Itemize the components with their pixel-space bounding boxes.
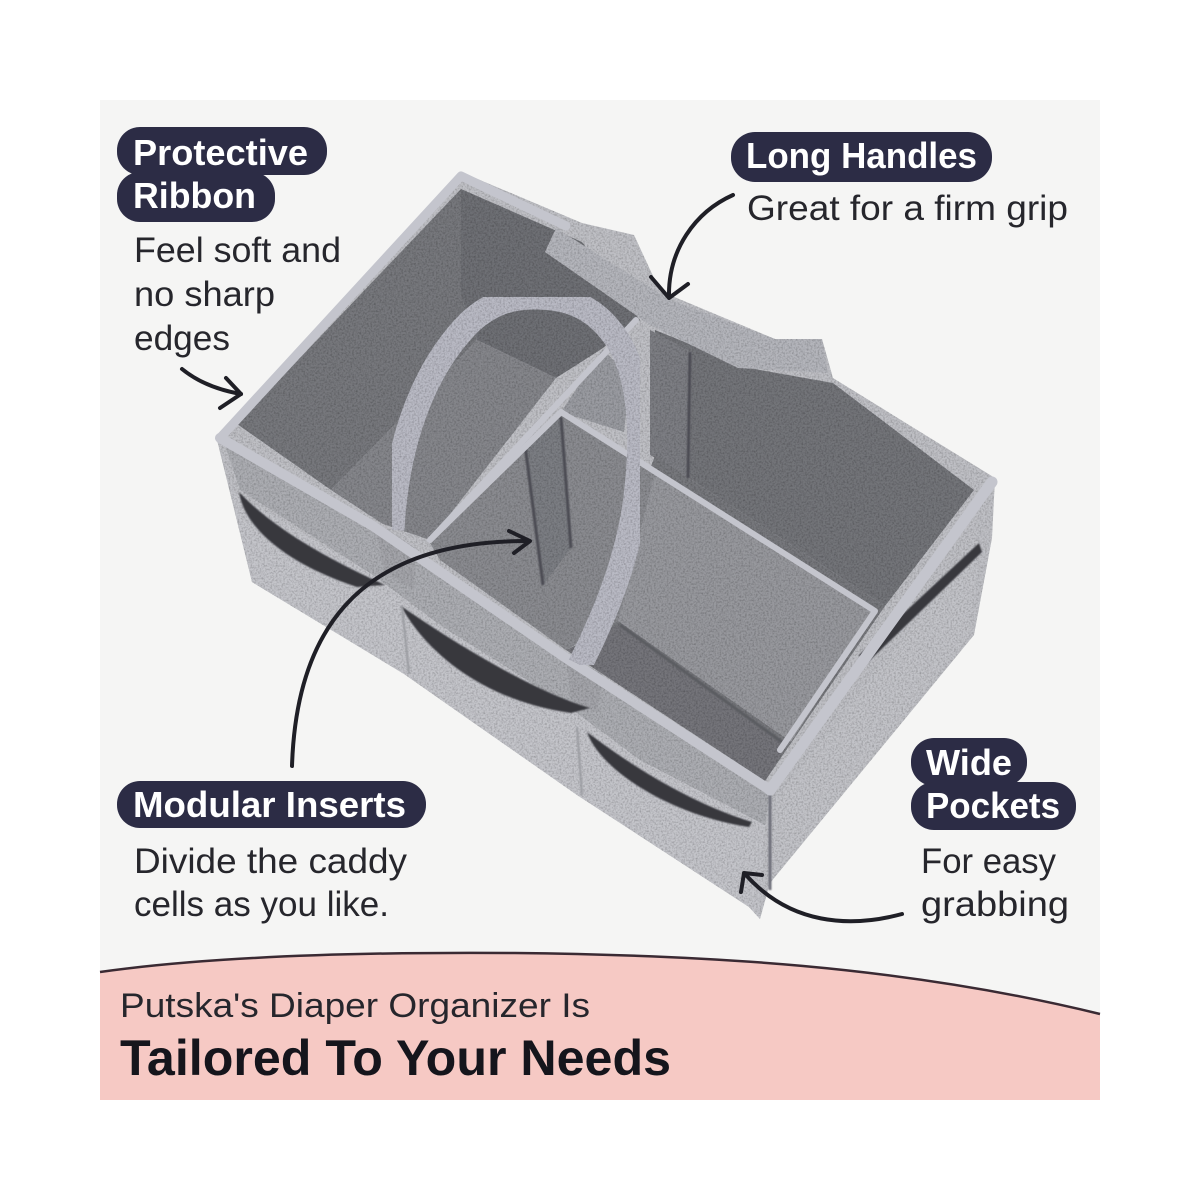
- banner subtitle: Putska's Diaper Organizer Is: [120, 987, 590, 1025]
- pill label: Long Handles: [746, 135, 977, 176]
- banner title: Tailored To Your Needs: [120, 1030, 671, 1086]
- right compartment back wall: [655, 330, 974, 606]
- bottom banner: [100, 953, 1100, 1100]
- right compartment floor: [582, 456, 885, 781]
- product: felt caddy organizer: [216, 172, 995, 919]
- pink curved band: [100, 953, 1100, 1100]
- arrow: to handle: [651, 195, 733, 298]
- left compartment floor: [331, 340, 556, 540]
- description text: For easy: [921, 842, 1056, 881]
- front pocket panel: [230, 490, 765, 919]
- background panel: [100, 100, 1100, 1100]
- insert compartment divider: [525, 417, 571, 585]
- description text: [921, 842, 1069, 924]
- left compartment back wall: [461, 189, 640, 378]
- callout: wide pockets: [911, 738, 1076, 924]
- left compartment left wall: [237, 189, 477, 490]
- pill label: Pockets: [926, 785, 1060, 826]
- front upper wall: [225, 445, 770, 825]
- arrow: to ribbon edge: [182, 369, 241, 408]
- handle base patches: [373, 520, 415, 590]
- callout: modular inserts: [117, 781, 426, 924]
- right compartment dividing strip: [650, 330, 692, 478]
- description text: grabbing: [921, 885, 1069, 924]
- description text: [134, 842, 408, 924]
- pill label: Protective: [133, 132, 308, 173]
- arrow: to pocket: [741, 873, 902, 921]
- modular insert long panel: [618, 470, 875, 742]
- callout: protective ribbon: [117, 127, 341, 358]
- pill label: Ribbon: [133, 175, 256, 216]
- callout: long handles: [731, 132, 1068, 228]
- right side panel: [770, 543, 980, 883]
- seams and strip lines: [402, 352, 786, 890]
- description text: no sharp: [134, 275, 275, 314]
- description text: edges: [134, 319, 230, 358]
- caddy outer body: [216, 172, 995, 919]
- pocket openings: [239, 492, 982, 827]
- insert compartment: [430, 412, 655, 650]
- back handle strap: [545, 228, 828, 373]
- pill label: [911, 738, 1076, 830]
- protective ribbon rim: [220, 176, 992, 790]
- pill label: Modular Inserts: [133, 784, 406, 825]
- description text: Divide the caddy: [134, 842, 408, 881]
- description text: Feel soft and: [134, 231, 341, 270]
- upper divider wall: [561, 349, 630, 432]
- pill label: [117, 127, 327, 222]
- front arched handle: [392, 297, 640, 665]
- description text: cells as you like.: [134, 885, 389, 924]
- description text: Great for a firm grip: [747, 189, 1068, 228]
- pill label: Wide: [926, 742, 1012, 783]
- description text: [134, 231, 341, 358]
- arrow: to inserts: [292, 531, 530, 766]
- front floor strip: [566, 625, 786, 781]
